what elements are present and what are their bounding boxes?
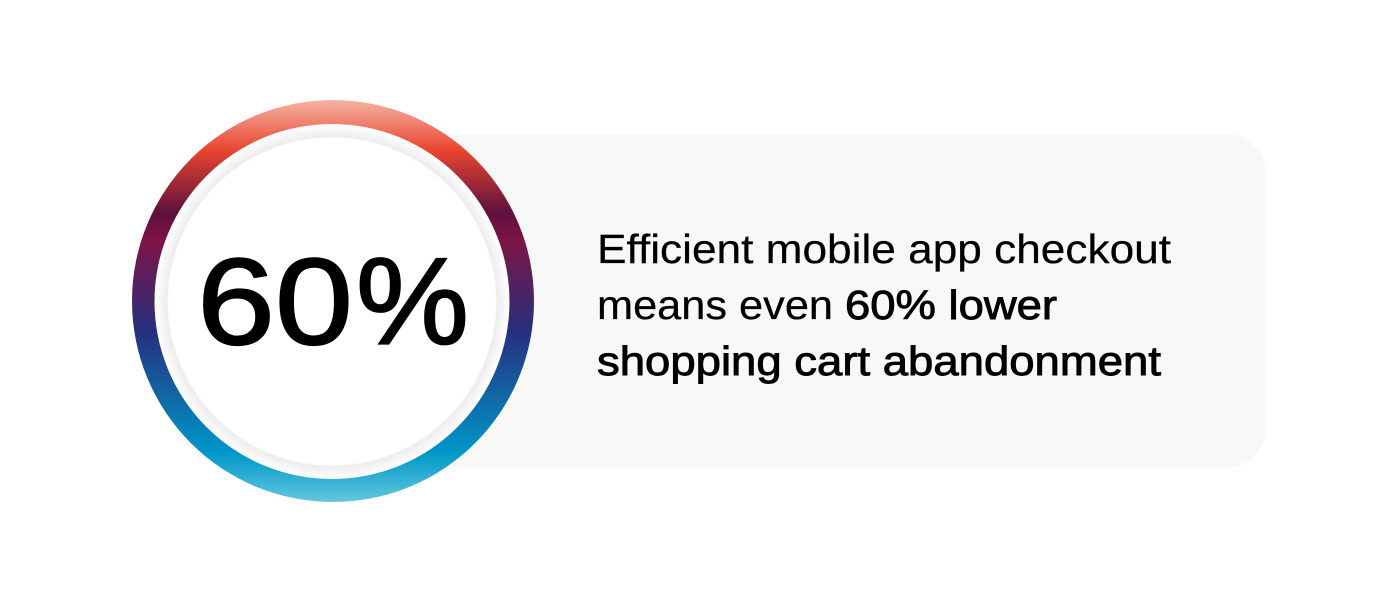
big stat: 60%: 60 (197, 234, 353, 371)
description text: 60% lower (845, 282, 1057, 328)
description text: shopping cart abandonment (597, 338, 1162, 384)
big stat: 60%: % (356, 234, 469, 371)
description text (597, 226, 1172, 384)
gradient ring (132, 100, 534, 502)
gradient ring badge (132, 100, 534, 502)
description text: Efficient mobile app checkout (597, 226, 1172, 272)
inner white disc with soft edge (154, 124, 510, 479)
panel: text background (400, 134, 1266, 468)
description text: means even (597, 282, 833, 328)
